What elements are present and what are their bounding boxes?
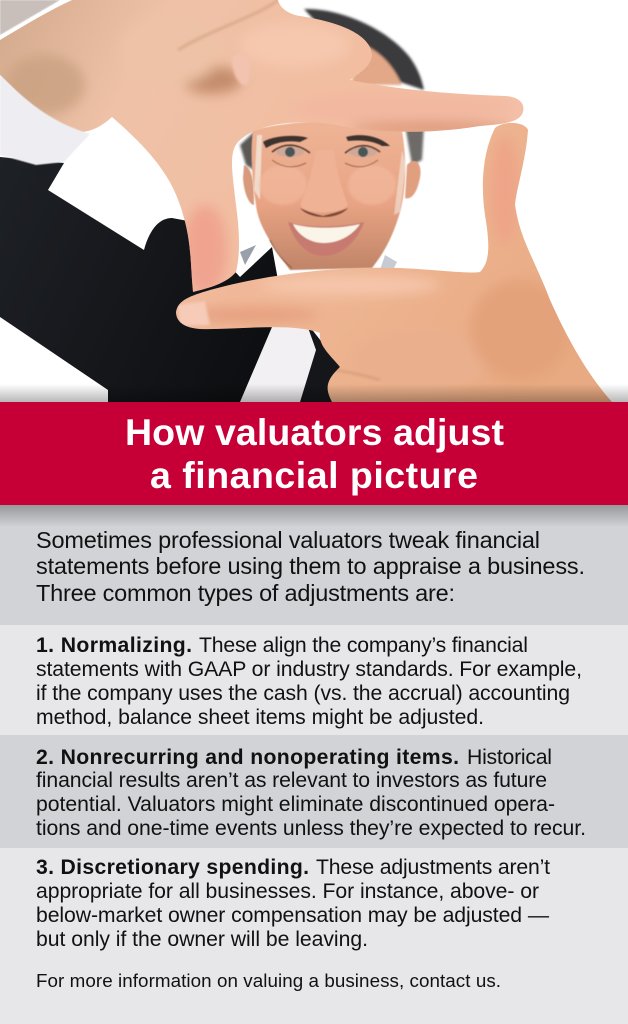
banner shadow xyxy=(0,505,628,527)
hair xyxy=(240,9,424,170)
panel: 3. Discretionary spending: 3. Discretionary spending. xyxy=(36,856,309,879)
panel: 1. Normalizing: These align the company’s financial xyxy=(199,634,528,657)
panel: 3. Discretionary spending: but only if the owner will be leaving. xyxy=(36,928,368,951)
collar shadow xyxy=(240,245,256,265)
panel: 2. Nonrecurring and nonoperating items: financial results aren’t as relevant to investors as future xyxy=(36,769,547,792)
panel: 3. Discretionary spending xyxy=(0,848,628,1024)
intro text xyxy=(36,527,585,606)
intro text: statements before using them to appraise a business. xyxy=(36,553,585,579)
face xyxy=(252,121,405,270)
upper sleeve xyxy=(0,0,60,35)
ears xyxy=(243,165,254,205)
panel: 3. Discretionary spending: These adjustments aren’t xyxy=(316,856,550,879)
jacket xyxy=(0,157,300,402)
panel: 1. Normalizing: if the company uses the cash (vs. the accrual) accounting xyxy=(36,682,570,705)
face highlights xyxy=(254,135,262,200)
panel: 1. Normalizing: method, balance sheet items might be adjusted. xyxy=(36,706,484,729)
top hand with index finger and thumb xyxy=(0,0,530,295)
panel: 2. Nonrecurring and nonoperating items: tions and one-time events unless they’re expected to recur. xyxy=(36,817,586,840)
intro text: Three common types of adjustments are: xyxy=(36,580,455,606)
intro text: Sometimes professional valuators tweak financial xyxy=(36,527,540,553)
panel: 3. Discretionary spending: below-market owner compensation may be adjusted — xyxy=(36,904,550,927)
panel: 2. Nonrecurring and nonoperating items: potential. Valuators might eliminate discontinued opera- xyxy=(36,793,555,816)
panel: 3. Discretionary spending: appropriate for all businesses. For instance, above- or xyxy=(36,880,539,903)
bottom photo shadow xyxy=(0,384,628,402)
panel: intro background xyxy=(0,505,628,625)
tie xyxy=(300,322,340,402)
panel: photo of smiling businessman framing with his fingers xyxy=(0,0,628,404)
bottom hand with index finger and thumb xyxy=(170,118,620,404)
panel: 2. Nonrecurring and nonoperating items xyxy=(0,735,628,848)
panel: 1. Normalizing xyxy=(0,625,628,735)
panel: 1. Normalizing: statements with GAAP or industry standards. For example, xyxy=(36,658,582,681)
shirt xyxy=(240,317,316,402)
eyebrows xyxy=(263,136,308,148)
closing note: For more information on valuing a business, contact us. xyxy=(36,970,501,991)
title banner: How valuators adjust xyxy=(125,411,504,453)
panel: 2. Nonrecurring and nonoperating items: 2. Nonrecurring and nonoperating items. xyxy=(36,746,459,769)
eyes xyxy=(276,147,304,157)
mouth xyxy=(288,222,364,256)
title banner: a financial picture xyxy=(150,454,478,496)
panel: 2. Nonrecurring and nonoperating items: Historical xyxy=(467,746,552,769)
shirt cuff xyxy=(0,75,90,165)
title banner xyxy=(0,402,628,505)
panel: 1. Normalizing: 1. Normalizing. xyxy=(36,634,192,657)
